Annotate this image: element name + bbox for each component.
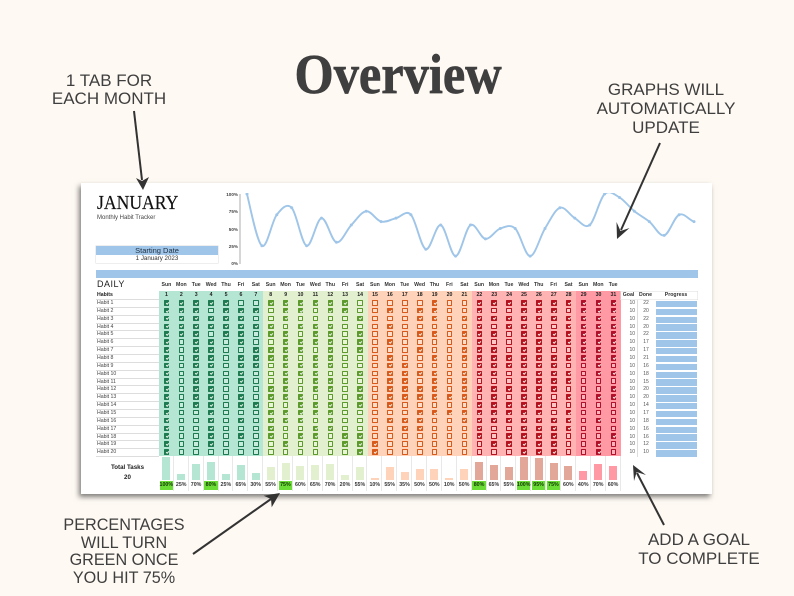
callout: percentages: PERCENTAGES (63, 516, 185, 534)
daily percentage bar chart (160, 456, 621, 491)
callout: tabs: EACH MONTH (52, 89, 166, 108)
daily percentage bar chart: 55% (384, 482, 395, 488)
goal, done and progress columns: 20 (643, 324, 649, 330)
weekday labels: Thu (430, 282, 439, 288)
goal, done and progress columns: 16 (643, 363, 649, 369)
week 5 checkboxes (576, 291, 621, 456)
week 2 checkboxes: 10 (298, 292, 303, 298)
daily percentage bar chart: 50% (459, 482, 469, 488)
total tasks label (111, 464, 144, 481)
week 4 checkboxes (472, 291, 576, 456)
week 2 checkboxes: 8 (269, 292, 272, 298)
callout: tabs (52, 71, 166, 108)
habit names: Habit 8 (97, 355, 113, 361)
weekday labels: Sun (578, 282, 588, 288)
arrow: to month tab (134, 111, 149, 190)
goal, done and progress columns: 15 (643, 379, 649, 385)
total tasks label: Total Tasks (111, 464, 144, 471)
week 3 checkboxes: 16 (387, 292, 393, 298)
habit names: Habit 3 (97, 316, 113, 322)
habit names: Habit 17 (97, 426, 116, 432)
habit names: Habit 9 (97, 363, 113, 369)
goal, done and progress columns: 10 (629, 300, 635, 306)
goal, done and progress columns: 21 (643, 355, 649, 361)
goal, done and progress columns: 10 (629, 339, 635, 345)
goal, done and progress columns: 10 (629, 434, 635, 440)
goal, done and progress columns: 10 (629, 371, 635, 377)
goal, done and progress columns: 10 (629, 363, 635, 369)
daily percentage bar chart: 65% (310, 482, 320, 488)
line chart: daily completion: 50% (229, 227, 238, 232)
week 4 checkboxes: 22 (476, 292, 482, 298)
goal, done and progress columns: Progress (665, 292, 687, 298)
week 1 checkboxes: 6 (239, 292, 242, 298)
goal, done and progress columns: 16 (643, 434, 649, 440)
callout: graphs (596, 80, 735, 137)
goal, done and progress columns: 10 (629, 441, 635, 447)
goal, done and progress columns: 17 (643, 410, 649, 416)
goal, done and progress columns: 10 (629, 402, 635, 408)
weekday labels: Sun (474, 282, 484, 288)
daily percentage bar chart: 20% (340, 482, 350, 488)
daily percentage bar chart: 100% (517, 482, 530, 488)
week 1 checkboxes: 2 (180, 292, 183, 298)
weekday labels: Sat (252, 282, 260, 288)
habit names: Habit 16 (97, 418, 116, 424)
week 3 checkboxes: 21 (461, 292, 467, 298)
daily percentage bar chart: 70% (325, 482, 335, 488)
goal, done and progress columns: 10 (629, 418, 635, 424)
goal, done and progress columns: 10 (629, 394, 635, 400)
daily percentage bar chart: 75% (548, 482, 559, 488)
habit names: Habit 13 (97, 394, 116, 400)
weekday labels: Mon (176, 282, 187, 288)
daily percentage bar chart: 25% (176, 482, 186, 488)
week 1 checkboxes: 5 (225, 292, 227, 298)
week 1 checkboxes: 1 (165, 292, 168, 298)
daily percentage bar chart: 60% (295, 482, 306, 488)
habit names: Habit 14 (97, 402, 116, 408)
section heading: daily: DAILY (97, 279, 125, 289)
daily percentage bar chart: 55% (355, 482, 365, 488)
arrow: to goal column (633, 465, 664, 525)
starting date box (96, 246, 218, 263)
callout: percentages: YOU HIT 75% (73, 569, 175, 587)
starting date box: Starting Date (135, 246, 179, 255)
habit names: Habit 4 (97, 324, 113, 330)
weekday labels: Thu (534, 282, 543, 288)
goal, done and progress columns: 10 (629, 386, 635, 392)
week 3 checkboxes: 18 (417, 292, 423, 298)
arrow: to percentages (193, 493, 280, 554)
goal, done and progress columns: 18 (643, 418, 649, 424)
weekday labels: Mon (489, 282, 499, 288)
panel: monthly tracker sheet (81, 183, 712, 494)
goal, done and progress columns: 17 (643, 347, 649, 353)
week 2 checkboxes: 13 (342, 292, 348, 298)
goal, done and progress columns: 22 (643, 331, 649, 337)
goal, done and progress columns: 22 (643, 300, 649, 306)
daily percentage bar chart: 65% (235, 482, 246, 488)
weekday labels: Thu (221, 282, 231, 288)
month heading: JANUARY (97, 192, 178, 214)
goal, done and progress columns: 10 (629, 331, 635, 337)
daily percentage bar chart: 95% (533, 482, 544, 488)
week 2 checkboxes (263, 291, 368, 456)
habit names: Habit 1 (97, 300, 113, 306)
callout: goal: TO COMPLETE (638, 549, 760, 568)
daily percentage bar chart: 65% (489, 482, 499, 488)
line chart: daily completion: 25% (229, 244, 238, 249)
weekday labels: Tue (192, 282, 201, 288)
daily percentage bar chart: 60% (563, 482, 574, 488)
daily percentage bar chart: 75% (280, 482, 291, 488)
weekday labels: Fri (446, 282, 453, 288)
subtitle: Monthly Habit Tracker (97, 215, 155, 221)
goal, done and progress columns: 10 (629, 308, 635, 314)
daily percentage bar chart: 30% (250, 482, 261, 488)
goal, done and progress columns: 10 (629, 449, 635, 455)
daily percentage bar chart: 50% (429, 482, 440, 488)
week 5 checkboxes: 29 (581, 292, 587, 298)
weekday labels: Wed (310, 282, 321, 288)
weekday labels: Sun (162, 282, 171, 288)
goal, done and progress columns (620, 291, 698, 457)
goal, done and progress columns: 12 (643, 441, 649, 447)
goal, done and progress columns: 10 (629, 426, 635, 432)
callout: graphs: UPDATE (632, 118, 700, 137)
weekday labels: Tue (400, 282, 409, 288)
total tasks label: 20 (124, 474, 131, 481)
goal, done and progress columns: 10 (629, 347, 635, 353)
callout: graphs: GRAPHS WILL (608, 80, 724, 99)
callout: percentages: WILL TURN (81, 534, 167, 552)
weekday labels: Mon (384, 282, 395, 288)
goal, done and progress columns: 10 (629, 379, 635, 385)
habit names: Habit 15 (97, 410, 116, 416)
callout: percentages: GREEN ONCE (70, 551, 178, 569)
goal, done and progress columns: 10 (629, 324, 635, 330)
habit names: Habit 7 (97, 347, 113, 353)
goal, done and progress columns: 10 (643, 449, 649, 455)
goal, done and progress columns: Done (639, 292, 652, 298)
goal, done and progress columns: 20 (643, 394, 649, 400)
weekday labels: Wed (206, 282, 217, 288)
week 5 checkboxes: 30 (596, 292, 601, 298)
daily percentage bar chart: 80% (206, 482, 216, 488)
weekday labels: Thu (325, 282, 335, 288)
week 5 checkboxes: 31 (611, 292, 616, 298)
habit names: Habit 10 (97, 371, 116, 377)
week 3 checkboxes: 17 (402, 292, 408, 298)
habit names: Habit 18 (97, 434, 116, 440)
week 4 checkboxes: 27 (551, 292, 557, 298)
week 4 checkboxes: 24 (506, 292, 512, 298)
weekday labels: Tue (609, 282, 618, 288)
habit names: Habit 5 (97, 331, 113, 337)
weekday labels: Sun (266, 282, 276, 288)
line chart: daily completion: 75% (229, 209, 238, 214)
weekday labels: Tue (296, 282, 305, 288)
habit names: Habit 2 (97, 308, 113, 314)
habit names: Habit 19 (97, 441, 116, 447)
goal, done and progress columns: 20 (643, 308, 649, 314)
week 2 checkboxes: 9 (284, 292, 287, 298)
goal, done and progress columns: 10 (629, 316, 635, 322)
weekday labels: Sat (460, 282, 468, 288)
goal, done and progress columns: 10 (629, 355, 635, 361)
daily percentage bar chart: 35% (399, 482, 410, 488)
weekday labels: Wed (518, 282, 529, 288)
daily percentage bar chart: 70% (191, 482, 201, 488)
daily percentage bar chart: 55% (503, 482, 514, 488)
line chart: daily completion (226, 193, 696, 265)
week 1 checkboxes: 7 (254, 292, 257, 298)
goal, done and progress columns: 20 (643, 386, 649, 392)
goal, done and progress columns: 17 (643, 339, 649, 345)
weekday labels: Tue (504, 282, 513, 288)
weekday labels: Mon (280, 282, 291, 288)
habit names: Habits (97, 292, 113, 298)
week 1 checkboxes: 3 (195, 292, 198, 298)
week 4 checkboxes: 26 (536, 292, 542, 298)
daily percentage bar chart: 80% (474, 482, 484, 488)
daily percentage bar chart: 40% (578, 482, 589, 488)
habit names: Habit 20 (97, 449, 116, 455)
week 4 checkboxes: 23 (491, 292, 497, 298)
week 2 checkboxes: 14 (357, 292, 363, 298)
habit names (96, 292, 159, 457)
goal, done and progress columns: 16 (643, 426, 649, 432)
week 1 checkboxes: 4 (210, 292, 213, 298)
daily percentage bar chart: 55% (265, 482, 276, 488)
weekday labels: Sun (370, 282, 380, 288)
week 2 checkboxes: 11 (313, 292, 318, 298)
title: Overview (294, 44, 502, 106)
week 3 checkboxes (368, 291, 472, 456)
daily percentage bar chart: 60% (608, 482, 618, 488)
callout: goal (638, 530, 760, 568)
weekday labels: Fri (550, 282, 557, 288)
goal, done and progress columns: 22 (643, 316, 649, 322)
weekday labels: Fri (238, 282, 244, 288)
goal, done and progress columns: Goal (623, 292, 634, 298)
week 3 checkboxes: 15 (372, 292, 378, 298)
week 4 checkboxes: 25 (521, 292, 527, 298)
week 3 checkboxes: 20 (447, 292, 452, 298)
daily percentage bar chart: 10% (369, 482, 380, 488)
daily percentage bar chart: 25% (221, 482, 231, 488)
week 4 checkboxes: 28 (566, 292, 572, 298)
weekday labels: Wed (414, 282, 425, 288)
blue divider band (96, 270, 698, 278)
habit names: Habit 6 (97, 339, 113, 345)
weekday labels: Mon (593, 282, 604, 288)
daily percentage bar chart: 10% (444, 482, 455, 488)
habit names: Habit 11 (97, 379, 116, 385)
week 3 checkboxes: 19 (432, 292, 437, 298)
callout: percentages (63, 516, 185, 587)
callout: tabs: 1 TAB FOR (66, 71, 152, 90)
weekday labels: Sat (564, 282, 573, 288)
callout: goal: ADD A GOAL (648, 530, 750, 549)
week 2 checkboxes: 12 (327, 292, 333, 298)
callout: graphs: AUTOMATICALLY (597, 99, 735, 118)
daily percentage bar chart: 100% (160, 482, 173, 488)
week 1 checkboxes (159, 291, 263, 456)
starting date box: 1 January 2023 (136, 255, 178, 262)
habit names: Habit 12 (97, 386, 116, 392)
weekday labels: Fri (342, 282, 348, 288)
daily percentage bar chart: 50% (414, 482, 425, 488)
line chart: daily completion: 0% (231, 261, 238, 266)
daily percentage bar chart: 70% (593, 482, 603, 488)
line chart: daily completion: 100% (226, 192, 238, 197)
goal, done and progress columns: 18 (643, 371, 649, 377)
weekday labels (162, 282, 618, 288)
goal, done and progress columns: 14 (643, 402, 649, 408)
arrow: to graph (616, 143, 660, 239)
weekday labels: Sat (356, 282, 364, 288)
goal, done and progress columns: 10 (629, 410, 635, 416)
